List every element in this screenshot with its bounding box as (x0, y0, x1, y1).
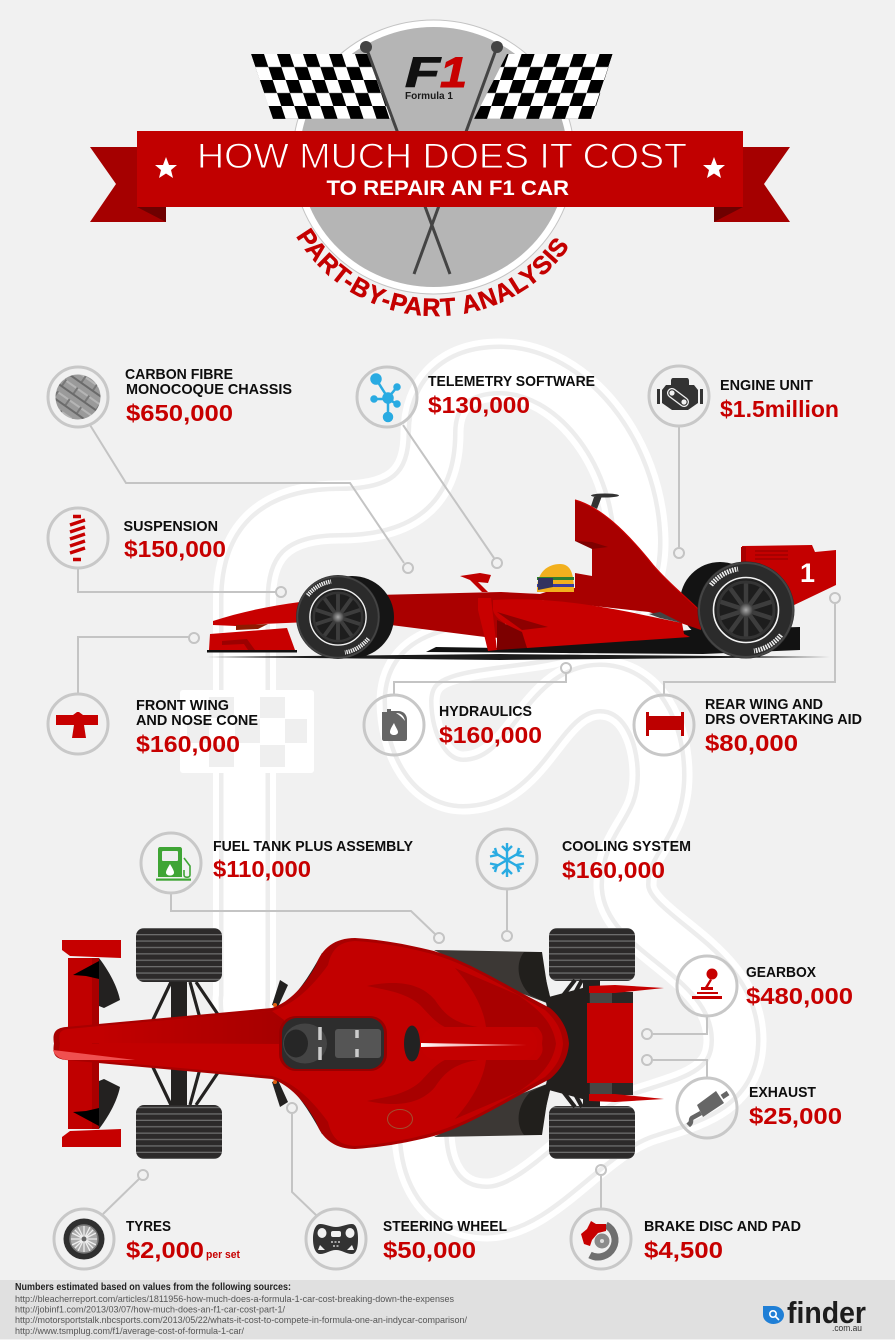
ring (677, 1078, 737, 1138)
side pod (493, 599, 690, 648)
price: $4,500 (644, 1237, 723, 1263)
price: $50,000 (383, 1237, 476, 1263)
callout: suspension (48, 508, 286, 597)
icon: gear stick (692, 968, 722, 999)
label (125, 366, 292, 398)
label: EXHAUST (749, 1084, 816, 1101)
label (136, 697, 258, 729)
cockpit (279, 1016, 387, 1071)
price: $110,000 (213, 856, 311, 882)
price: $150,000 (124, 536, 226, 562)
ring (48, 508, 108, 568)
background race track (244, 370, 735, 1210)
callout: brake disc and pad (571, 1165, 801, 1269)
ring (141, 833, 201, 893)
price: $160,000 (439, 722, 542, 748)
ring (571, 1209, 631, 1269)
icon: snowflake (490, 843, 524, 877)
ring (306, 1209, 366, 1269)
label: SUSPENSION (124, 518, 218, 535)
core body centre strip (421, 1027, 537, 1060)
price note: per set (206, 1249, 240, 1261)
label (705, 696, 862, 728)
label: FUEL TANK PLUS ASSEMBLY (213, 838, 413, 855)
footer panel (0, 1280, 895, 1339)
price: $160,000 (562, 857, 665, 883)
icon: carbon weave (48, 367, 108, 427)
price: $1.5million (720, 396, 839, 422)
roll camera (591, 494, 619, 509)
icon: rear wing (646, 712, 684, 736)
floor (426, 627, 800, 654)
chassis (375, 592, 540, 638)
source links: http://bleacherreport.com/articles/1811956-how-much-does-a-formula-1-car-cost-breaking-down-the-expenses (15, 1294, 454, 1305)
price: $650,000 (126, 400, 233, 426)
ring (649, 366, 709, 426)
ring (357, 367, 417, 427)
nose (213, 602, 310, 626)
start-line checker box (180, 690, 314, 773)
label: FRONT WING (136, 697, 229, 714)
source links: http://jobinf1.com/2013/03/07/how-much-does-an-f1-car-cost-part-1/ (15, 1304, 285, 1316)
front tyre (296, 575, 380, 659)
source links: http://www.tsmplug.com/f1/average-cost-of-formula-1-car/ (15, 1326, 244, 1337)
Formula 1 logo (405, 49, 467, 102)
icon: oil can (382, 709, 407, 741)
label: MONOCOQUE CHASSIS (126, 381, 292, 398)
engine cover logo (388, 1110, 412, 1128)
side view F1 car (207, 494, 836, 660)
checkered flag right (474, 54, 613, 119)
callout: cooling system (477, 829, 691, 941)
icon: engine (657, 378, 703, 410)
ground shadow (207, 654, 830, 660)
ring (364, 695, 424, 755)
callout: engine unit (649, 366, 839, 558)
engine cover fin (500, 500, 701, 630)
helmet (537, 564, 574, 592)
callout: steering wheel (287, 1103, 507, 1269)
front roll wing (460, 573, 491, 592)
finder logo: finder (787, 1295, 866, 1330)
nose highlight (53, 1050, 135, 1060)
source links (15, 1294, 467, 1337)
label: AND NOSE CONE (136, 712, 258, 729)
title banner (90, 131, 790, 222)
callout: gearbox (642, 956, 853, 1039)
front wing (207, 628, 297, 652)
rear wing (587, 1003, 633, 1083)
label: ENGINE UNIT (720, 377, 813, 394)
banner star right (703, 157, 725, 178)
finder logo: .com.au (832, 1323, 862, 1333)
callout: tyres (54, 1170, 240, 1269)
label: GEARBOX (746, 964, 816, 981)
label: REAR WING AND (705, 696, 823, 713)
ring (677, 956, 737, 1016)
icon: steering wheel (313, 1224, 358, 1254)
ring (634, 695, 694, 755)
Formula 1 logo: 1 (440, 49, 467, 97)
crossed flag poles (360, 41, 503, 274)
label: STEERING WHEEL (383, 1218, 507, 1235)
callout: fuel tank (141, 833, 444, 943)
callout: rear wing and DRS (634, 593, 862, 756)
source links: http://motorsportstalk.nbcsports.com/2013/05/22/whats-it-cost-to-compete-in-formula-one-an-indycar-comparison/ (15, 1315, 467, 1326)
top view F1 car (53, 928, 664, 1159)
label: DRS OVERTAKING AID (705, 711, 862, 728)
icon: spring (70, 516, 85, 560)
finder logo (763, 1295, 866, 1333)
price: $480,000 (746, 983, 853, 1009)
spine streak (421, 1043, 527, 1047)
price: $80,000 (705, 730, 798, 756)
Formula 1 logo: Formula 1 (405, 90, 453, 102)
callout: hydraulics (364, 663, 571, 755)
icon: exhaust pipe (688, 1091, 728, 1124)
front far tyre (310, 576, 394, 658)
ring (54, 1209, 114, 1269)
Formula 1 logo: F (405, 49, 442, 97)
header emblem: oval backdrop (292, 20, 574, 294)
icon: brake disc (581, 1221, 615, 1257)
label: TYRES (126, 1218, 171, 1235)
nose shading (100, 1011, 284, 1044)
bargeboard (478, 598, 497, 651)
main title: HOW MUCH DOES IT COST (197, 137, 687, 176)
callout: front wing and nose cone (48, 633, 258, 757)
label: COOLING SYSTEM (562, 838, 691, 855)
icon: tyre (64, 1218, 104, 1260)
icon: network nodes (372, 374, 400, 421)
label: TELEMETRY SOFTWARE (428, 373, 595, 390)
price: $2,000 (126, 1237, 204, 1263)
banner star left (155, 157, 177, 178)
sources heading: Numbers estimated based on values from the following sources: (15, 1282, 291, 1293)
rear wing (741, 545, 836, 607)
icon: fuel pump (156, 847, 191, 881)
subtitle: TO REPAIR AN F1 CAR (326, 177, 569, 200)
callout: exhaust (642, 1055, 842, 1138)
price: $25,000 (749, 1103, 842, 1129)
callout: carbon fibre chassis (48, 366, 413, 573)
checkered flag left (251, 54, 392, 119)
rear wing: 1 (800, 558, 815, 588)
label: CARBON FIBRE (125, 366, 233, 383)
label: HYDRAULICS (439, 703, 532, 720)
rear far tyre (680, 562, 760, 642)
icon: front wing (56, 712, 98, 738)
price: $130,000 (428, 392, 530, 418)
ring (477, 829, 537, 889)
air intake (404, 1026, 420, 1062)
rear tyre (698, 562, 794, 658)
curved tagline: PART-BY-PART ANALYSIS (296, 228, 568, 316)
label: BRAKE DISC AND PAD (644, 1218, 801, 1235)
price: $160,000 (136, 731, 240, 757)
ring (48, 694, 108, 754)
callout: telemetry software (357, 367, 595, 568)
